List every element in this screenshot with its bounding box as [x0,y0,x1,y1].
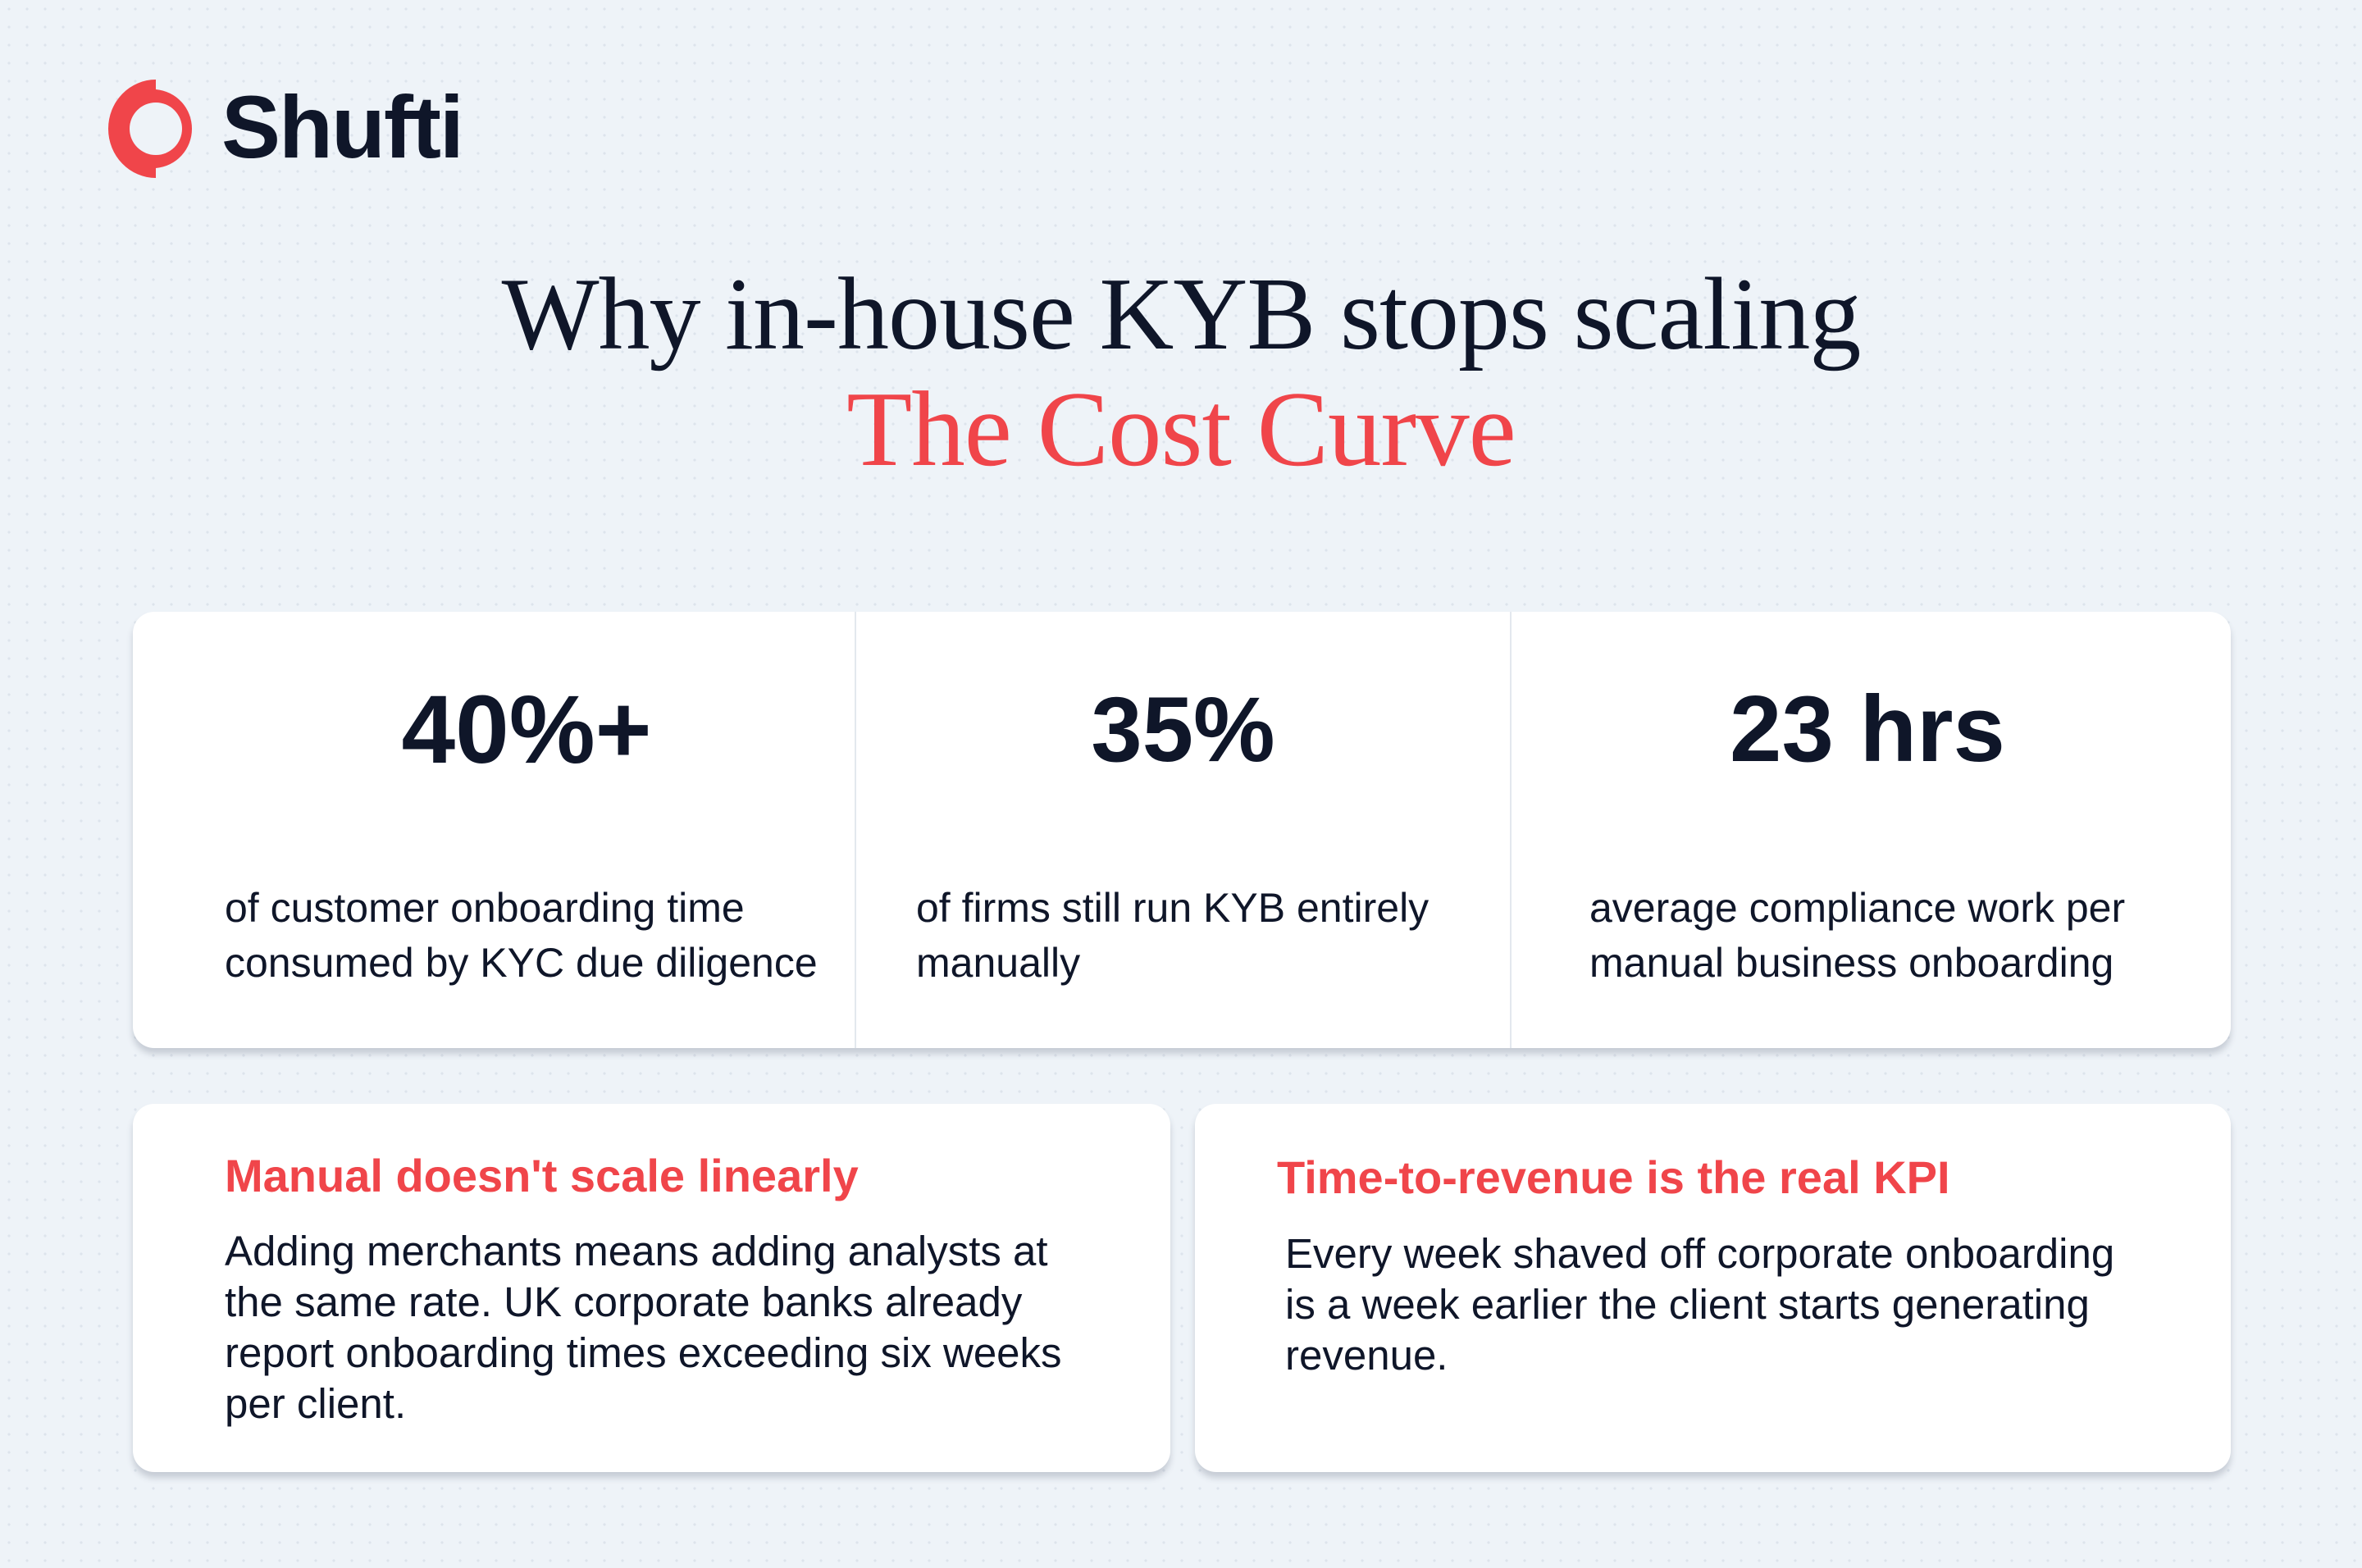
icon: logo mark [108,80,192,178]
stat: 40%+ [225,676,818,986]
body text: revenue. [1285,1332,1448,1379]
stat: 35%: 35% [1091,678,1275,781]
panel: time-to-revenue [1195,1104,2231,1472]
body text: Every week shaved off corporate onboarding [1285,1230,2114,1277]
stat: 35%: manually [916,940,1080,986]
heading: Time-to-revenue is the real KPI [1277,1151,1950,1203]
logo [108,77,463,178]
stat: 35% [916,678,1429,986]
stat: 23 hrs: average compliance work per [1589,885,2125,931]
stat: 23 hrs: manual business onboarding [1589,940,2113,986]
stat: 40%+: of customer onboarding time [225,885,745,931]
title [502,258,1860,489]
body text [225,1228,1062,1427]
panel: stats [133,612,2231,1048]
stat: 40%+: 40%+ [401,676,652,784]
title: The Cost Curve [846,370,1516,489]
stat: 35%: of firms still run KYB entirely [916,885,1429,931]
heading: Manual doesn't scale linearly [225,1150,859,1201]
panel: manual doesn't scale [133,1104,1170,1472]
body text: the same rate. UK corporate banks already [225,1279,1022,1325]
body text [1285,1230,2114,1379]
stat: 23 hrs: 23 hrs [1730,677,2005,782]
body text: report onboarding times exceeding six weeks [225,1329,1062,1376]
stat: 40%+: consumed by KYC due diligence [225,940,818,986]
body text: per client. [225,1380,406,1427]
title: Why in-house KYB stops scaling [502,258,1860,371]
body text: is a week earlier the client starts generating [1285,1281,2090,1328]
logo text: Shufti [221,77,463,176]
body text: Adding merchants means adding analysts at [225,1228,1048,1274]
stat: 23 hrs [1589,677,2125,986]
